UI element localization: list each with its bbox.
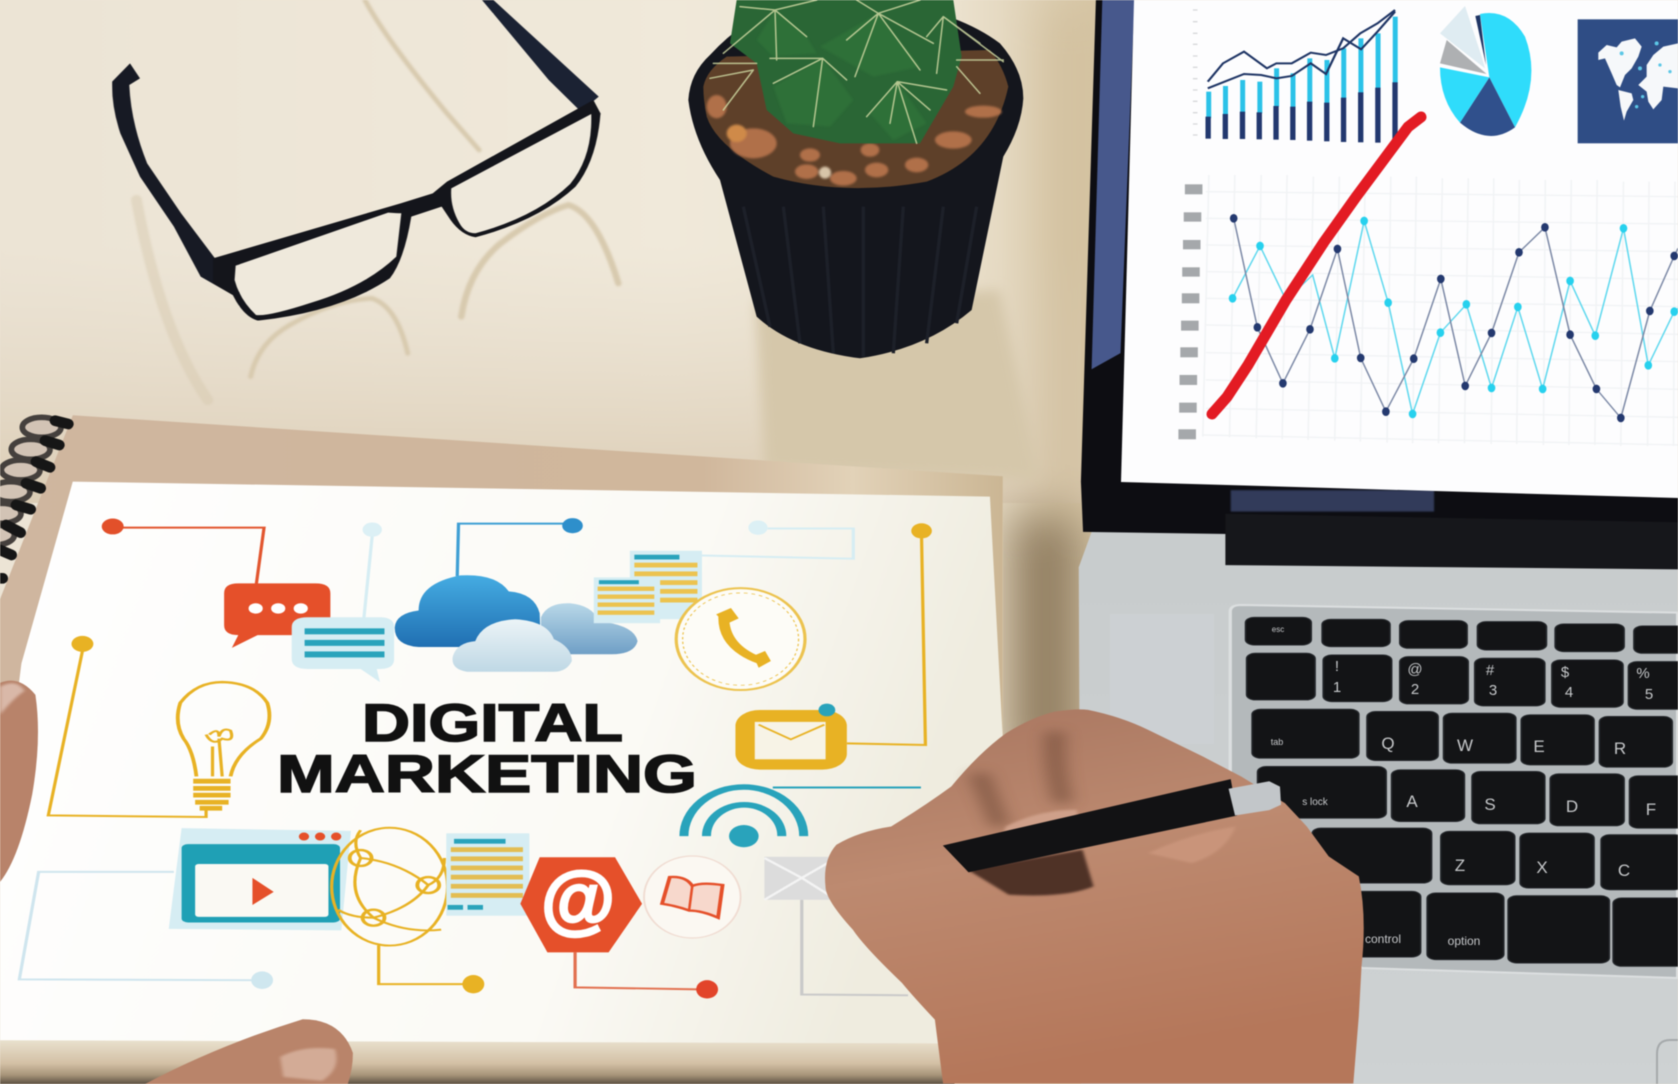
spiral binding (0, 417, 68, 578)
left hand upper finger (0, 681, 38, 882)
chart grid (1202, 175, 1678, 446)
heading line 1: DIGITAL (362, 694, 623, 753)
key labels: % (1636, 665, 1650, 682)
finger crease shadow (979, 732, 1063, 826)
left hand thumb (145, 1019, 353, 1084)
pot ribs (743, 207, 977, 357)
right temple arm (482, 0, 599, 112)
key labels: D (1566, 797, 1578, 816)
dark bars (1205, 82, 1398, 143)
icon: network globe (332, 828, 448, 946)
screen line chart (1178, 175, 1678, 446)
pot body (688, 18, 1023, 358)
key labels: s lock (1302, 797, 1329, 808)
key labels: E (1533, 737, 1545, 756)
heading line 2: MARKETING (277, 745, 697, 804)
connector lines (19, 524, 925, 995)
screen pie chart (1440, 6, 1531, 136)
axis labels (1178, 184, 1202, 439)
trend lines (1208, 10, 1395, 88)
screen bar chart (1193, 10, 1398, 143)
screen bezel (1081, 0, 1678, 540)
bar chart axis ticks (1193, 10, 1197, 135)
notebook backing (0, 415, 1003, 1054)
cactus plant (688, 0, 1023, 358)
laptop keyboard (1110, 605, 1678, 1084)
key labels: 3 (1489, 682, 1497, 699)
thumb highlight (1148, 826, 1236, 863)
cactus body (730, 0, 962, 143)
lower desk tone (0, 246, 1081, 503)
pebbles (707, 95, 1002, 186)
right hand holding pen (825, 709, 1364, 1084)
keyboard well (1230, 605, 1678, 978)
icon: red chat bubble (224, 583, 330, 648)
left fingernail highlight (0, 683, 24, 715)
notebook (0, 415, 1003, 1084)
icon: lightbulb (178, 682, 269, 808)
left hand fingers (0, 681, 353, 1084)
coil dark ends (0, 421, 68, 578)
navy series (1230, 214, 1678, 422)
key labels: Z (1455, 856, 1465, 875)
connector end dots (71, 518, 932, 998)
right lens (451, 114, 591, 233)
key labels: X (1536, 858, 1548, 877)
left thumb nail highlight (280, 1048, 336, 1081)
pale finger highlight (1001, 810, 1077, 840)
map continents (1598, 38, 1678, 121)
front frame (213, 100, 601, 321)
left lens (235, 213, 401, 315)
laptop base (1079, 0, 1678, 1084)
glasses (112, 0, 601, 321)
key labels: S (1484, 795, 1496, 814)
pen metal tip (1229, 781, 1281, 815)
grip shadow (968, 850, 1094, 895)
icon: stacked documents (594, 551, 702, 623)
white page (0, 482, 1003, 1043)
icon: grey envelope (764, 857, 837, 900)
cyan series (1229, 217, 1678, 418)
key labels: Q (1381, 734, 1395, 753)
key labels: 5 (1645, 686, 1653, 703)
icon: blue message bubble (292, 617, 394, 682)
icon: wifi signal (684, 787, 804, 847)
page stack edge (0, 1038, 955, 1084)
key labels: R (1614, 739, 1626, 758)
key labels: A (1406, 792, 1418, 811)
icon: phone circle (676, 588, 805, 690)
key labels: option (1448, 934, 1480, 948)
key labels: 1 (1333, 679, 1341, 696)
key labels: ! (1335, 658, 1339, 675)
coil rings (0, 417, 61, 545)
key labels: $ (1561, 664, 1570, 681)
bottom bezel reflection (1231, 490, 1434, 512)
at sign on hexagon: @ (541, 857, 615, 942)
laptop (1079, 0, 1678, 1084)
left temple arm (112, 63, 233, 295)
red hand-drawn growth line (1212, 117, 1421, 414)
key labels: @ (1407, 661, 1423, 678)
map island dots (1620, 41, 1672, 108)
keys (1246, 617, 1678, 966)
trackpad corner (1657, 1040, 1678, 1084)
desk shadows (1011, 0, 1092, 771)
key labels: control (1365, 932, 1401, 946)
hinge (1225, 514, 1678, 569)
speaker grille area (1110, 614, 1214, 744)
glasses shadow (136, 0, 618, 400)
icon: red hexagon (520, 857, 642, 952)
heading: digital marketing (277, 694, 697, 804)
cyan bars (1206, 17, 1398, 118)
key labels: C (1618, 861, 1630, 880)
key labels: F (1646, 800, 1656, 819)
cactus spines (710, 0, 1003, 143)
bezel blue reflection (1092, 0, 1134, 369)
key labels: tab (1271, 737, 1283, 747)
icon: video player (169, 828, 351, 930)
icon: article document (446, 833, 529, 916)
icon: yellow mail (735, 704, 847, 770)
key labels: 4 (1565, 684, 1573, 701)
key labels: 2 (1411, 681, 1419, 698)
icon: clouds (395, 575, 638, 672)
pot cast shadow (755, 290, 1040, 480)
key labels: esc (1272, 625, 1284, 634)
key labels (1271, 625, 1656, 948)
key labels: W (1457, 736, 1473, 755)
screen world map (1578, 19, 1678, 143)
soil (703, 50, 1008, 188)
digital marketing icon diagram (19, 518, 932, 998)
hand shape (825, 709, 1364, 1084)
pen (943, 779, 1281, 872)
laptop screen white area (1121, 0, 1678, 498)
key labels: # (1486, 662, 1495, 679)
icon: open book circle (644, 856, 741, 938)
pen barrel (943, 779, 1237, 872)
